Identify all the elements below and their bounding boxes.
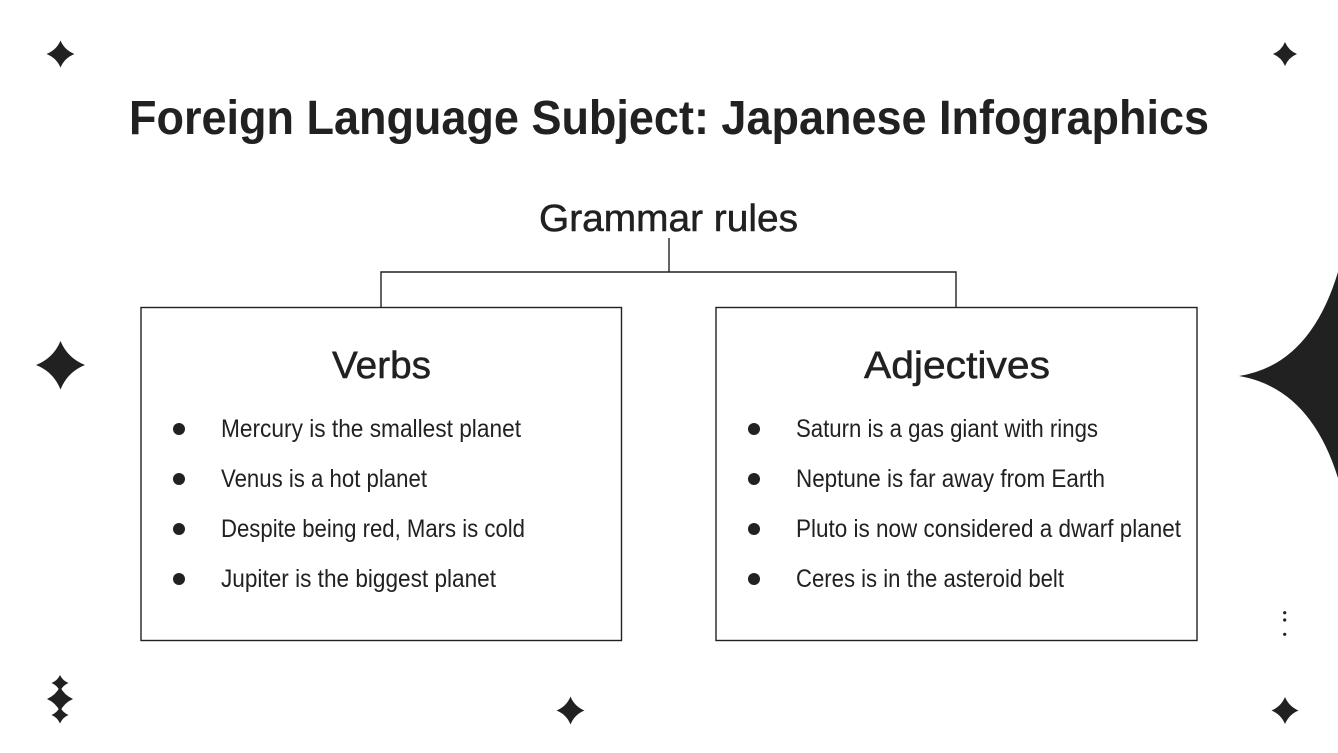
bullet list: adjectives (748, 415, 1181, 593)
icon: star top right (1273, 42, 1297, 66)
bullet list: adjectives: Neptune is far away from Earth (796, 465, 1105, 493)
heading: grammar rules: Grammar rules (539, 198, 798, 240)
bullet list: verbs: Jupiter is the biggest planet (221, 565, 496, 593)
icon: star middle left (36, 341, 85, 390)
title: Foreign Language Subject: Japanese Infographics (129, 92, 1209, 145)
icon: three dots (1283, 611, 1286, 636)
bullet list: adjectives: Ceres is in the asteroid belt (796, 565, 1064, 593)
panel outline: verbs (141, 308, 622, 640)
bullet list: verbs: Venus is a hot planet (221, 465, 427, 493)
icon: star bottom right (1272, 697, 1298, 724)
panel: adjectives (716, 308, 1197, 640)
connector between heading and panels (381, 238, 956, 307)
icon: large star cut off at right edge (1239, 272, 1338, 478)
heading: adjectives: Adjectives (864, 345, 1050, 387)
panel outline: adjectives (716, 308, 1197, 640)
bullet list: verbs: Despite being red, Mars is cold (221, 515, 525, 543)
bullet list: adjectives: Pluto is now considered a dwarf planet (796, 515, 1181, 543)
icon: star bottom centre (556, 696, 584, 724)
bullet list: adjectives: Saturn is a gas giant with rings (796, 415, 1098, 443)
heading: verbs: Verbs (332, 345, 431, 387)
icon: triple star bottom left (47, 675, 73, 724)
panel: verbs (141, 308, 622, 640)
bullet list: verbs (173, 415, 525, 593)
icon: star top left (46, 40, 74, 68)
bullet list: verbs: Mercury is the smallest planet (221, 415, 521, 443)
